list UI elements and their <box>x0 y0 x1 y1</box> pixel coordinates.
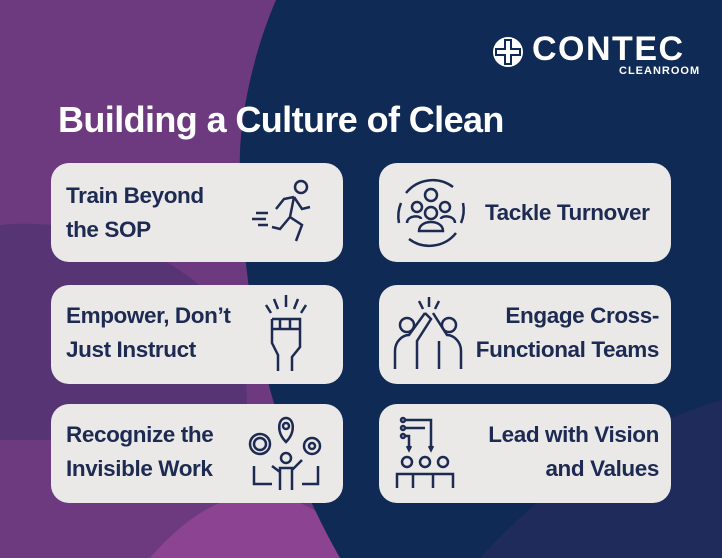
card: lead <box>379 404 671 503</box>
logo: CLEANROOM <box>619 65 700 77</box>
card: cross-functional <box>379 285 671 384</box>
card: turnover: Tackle Turnover <box>485 200 649 225</box>
card: train: the SOP <box>66 217 151 242</box>
card: empower: Just Instruct <box>66 337 196 362</box>
icon: high five <box>394 297 462 369</box>
card: lead: and Values <box>545 456 659 481</box>
icon: flow to people <box>396 416 454 488</box>
icon: team cycle <box>397 178 465 248</box>
card: recognize: Recognize the <box>66 422 213 447</box>
card: turnover <box>379 163 671 262</box>
card: empower <box>51 285 343 384</box>
icon: fist <box>265 295 307 371</box>
logo <box>493 30 700 77</box>
icon: person with clock, pin, gear <box>248 416 322 490</box>
card: recognize <box>51 404 343 503</box>
logo: CONTEC <box>532 30 685 68</box>
card: recognize: Invisible Work <box>66 456 213 481</box>
title: Building a Culture of Clean <box>58 99 504 140</box>
card: lead: Lead with Vision <box>488 422 659 447</box>
card: train <box>51 163 343 262</box>
card: train: Train Beyond <box>66 183 204 208</box>
icon: runner <box>252 180 310 242</box>
card: cross-functional: Engage Cross- <box>505 303 659 328</box>
card: empower: Empower, Don’t <box>66 303 230 328</box>
card: cross-functional: Functional Teams <box>476 337 659 362</box>
